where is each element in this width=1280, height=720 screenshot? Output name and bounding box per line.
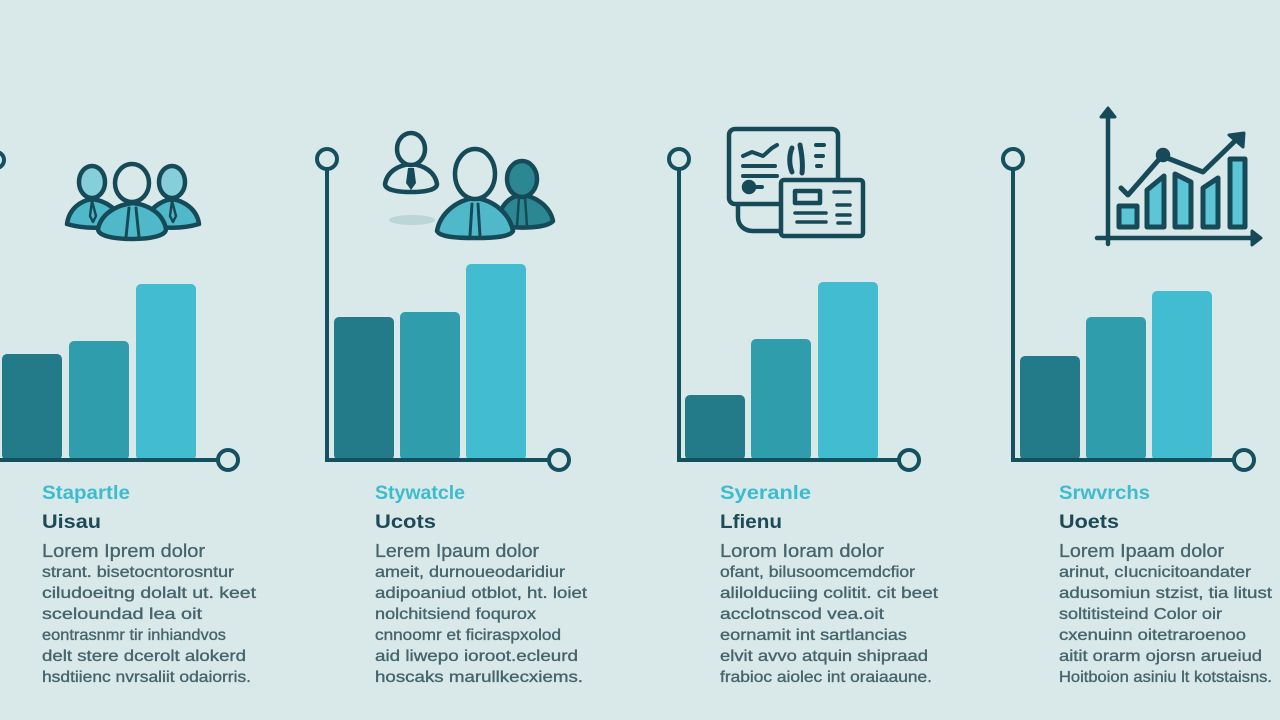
text block: column 2: nolchitsiend foqurox bbox=[375, 606, 536, 623]
panel: column 1 bbox=[0, 152, 257, 686]
text block: column 1: delt stere dcerolt alokerd bbox=[42, 648, 246, 665]
panel: column 4 bbox=[1003, 108, 1273, 686]
bar chart: column 4 bbox=[1003, 149, 1254, 470]
text block: column 1: eontrasnmr tir inhiandvos bbox=[42, 627, 226, 644]
text block: column 2: cnnoomr et ficiraspxolod bbox=[375, 627, 561, 644]
text block: column 2: hoscaks marullkecxiems. bbox=[375, 669, 583, 686]
text block: column 3: acclotnscod vea.oit bbox=[720, 606, 885, 623]
text block: column 4: Srwvrchs bbox=[1059, 483, 1150, 504]
text block: column 2: adipoaniud otblot, ht. loiet bbox=[375, 585, 588, 602]
text block: column 2: ameit, durnoueodaridiur bbox=[375, 564, 566, 581]
text block: column 3: Lorom Ioram dolor bbox=[720, 541, 884, 561]
text block: column 1: strant. bisetocntorosntur bbox=[42, 564, 235, 581]
text block: column 4: Hoitboion asiniu lt kotstaisns. bbox=[1059, 669, 1272, 686]
text block: column 3: eornamit int sartlancias bbox=[720, 627, 907, 644]
panel: column 3 bbox=[669, 129, 939, 686]
text block: column 4: soltitisteind Color oir bbox=[1059, 606, 1223, 623]
text block: column 2: Stywatcle bbox=[375, 483, 465, 504]
text block: column 4: arinut, cIucnicitoandater bbox=[1059, 564, 1252, 581]
text block: column 1: ciludoeitng dolalt ut. keet bbox=[42, 585, 257, 602]
text block: column 3 bbox=[720, 483, 939, 686]
text block: column 4: Uoets bbox=[1059, 512, 1119, 533]
text block: column 3: Lfienu bbox=[720, 512, 782, 533]
text block: column 2 bbox=[375, 483, 588, 686]
icon: rising chart with arrow bbox=[1097, 108, 1261, 245]
text block: column 1: Lorem Iprem dolor bbox=[42, 541, 205, 561]
text block: column 3: elvit avvo atquin shipraad bbox=[720, 648, 928, 665]
text block: column 2: aid liwepo ioroot.ecleurd bbox=[375, 648, 578, 665]
bar chart: column 1 bbox=[0, 152, 238, 470]
text block: column 3: Syeranle bbox=[720, 483, 811, 504]
text block: column 1 bbox=[42, 483, 257, 686]
text block: column 4 bbox=[1059, 483, 1273, 686]
bar chart: column 3 bbox=[669, 149, 919, 470]
text block: column 2: Lerem Ipaum dolor bbox=[375, 541, 539, 561]
text block: column 4: aitit orarm ojorsn arueiud bbox=[1059, 648, 1262, 665]
text block: column 1: hsdtiienc nvrsaliit odaiorris. bbox=[42, 669, 251, 686]
text block: column 1: Stapartle bbox=[42, 483, 130, 504]
text block: column 3: alilolduciing colitit. cit beet bbox=[720, 585, 939, 602]
text block: column 2: Ucots bbox=[375, 512, 436, 533]
text block: column 1: Uisau bbox=[42, 512, 101, 533]
panel: column 2 bbox=[317, 133, 588, 686]
text block: column 3: ofant, bilusoomcemdcfior bbox=[720, 564, 916, 581]
text block: column 1: sceloundad lea oit bbox=[42, 606, 203, 623]
icon: group of three people bbox=[67, 164, 199, 239]
icon: dashboard documents bbox=[729, 129, 863, 236]
icon: three people, one highlighted bbox=[385, 133, 553, 238]
text block: column 4: adusomiun stzist, tia litust bbox=[1059, 585, 1273, 602]
text block: column 4: cxenuinn oitetraroenoo bbox=[1059, 627, 1246, 644]
bar chart: column 2 bbox=[317, 149, 569, 470]
text block: column 3: frabioc aiolec int oraiaaune. bbox=[720, 669, 932, 686]
text block: column 4: Lorem Ipaam dolor bbox=[1059, 541, 1224, 561]
